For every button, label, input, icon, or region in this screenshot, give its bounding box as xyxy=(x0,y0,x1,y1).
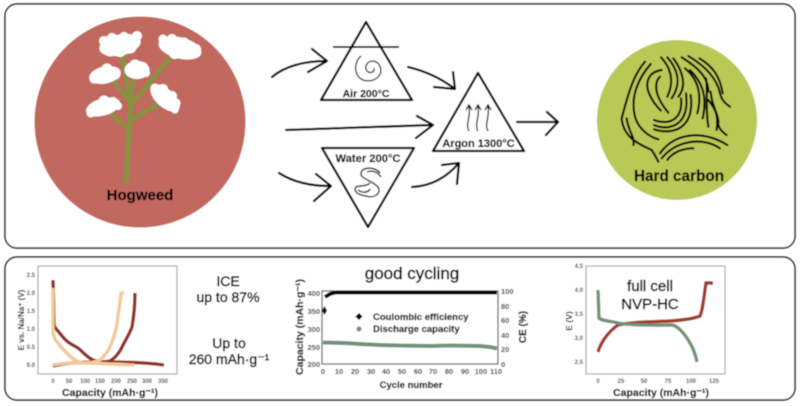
y axis ticks xyxy=(575,264,584,366)
chart: full cell xyxy=(564,264,725,399)
text: ICE percentage: up to 87% xyxy=(196,289,260,305)
icon: spiral xyxy=(356,56,381,81)
bottom axis ticks: 70 xyxy=(429,367,437,376)
left axis ticks: 300 xyxy=(307,325,320,334)
heading: good cycling: good cycling xyxy=(365,264,459,283)
icon: white flowers xyxy=(84,30,204,120)
right axis ticks: 0 xyxy=(501,360,505,369)
bottom axis ticks: 110 xyxy=(490,367,502,376)
x axis title: Capacity (mAh·g⁻¹) xyxy=(62,387,158,399)
triangle: water 200 C xyxy=(322,148,414,227)
bottom axis ticks: 10 xyxy=(335,367,343,376)
icon: carbon layers xyxy=(622,56,730,162)
y axis ticks: 3.0 xyxy=(575,336,584,342)
triangle: air 200 C xyxy=(321,22,412,100)
x axis ticks: 75 xyxy=(665,379,672,385)
bottom axis ticks: 30 xyxy=(367,367,375,376)
chart: half-cell charge discharge xyxy=(17,266,177,399)
legend: discharge capacity: Discharge capacity xyxy=(373,324,460,335)
y axis ticks: 4.0 xyxy=(575,288,584,294)
y axis ticks: 2.0 xyxy=(27,291,36,297)
x axis ticks: 150 xyxy=(95,379,106,385)
curve: charge xyxy=(598,283,713,352)
y axis ticks: 2.5 xyxy=(27,273,36,279)
label: Hard carbon: Hard carbon xyxy=(634,168,724,185)
y axis ticks: 2.5 xyxy=(575,360,584,366)
right axis ticks: 100 xyxy=(501,287,514,296)
right axis ticks: 60 xyxy=(501,316,509,325)
arrow: air to argon xyxy=(408,67,455,89)
y axis ticks: 4.5 xyxy=(575,264,584,270)
series: discharge capacity xyxy=(323,342,497,348)
y axis ticks: 0.0 xyxy=(27,363,36,369)
curve: light second cycle xyxy=(52,288,134,365)
bottom axis ticks: 40 xyxy=(382,367,390,376)
left axis ticks: 400 xyxy=(307,289,320,298)
curve: discharge xyxy=(598,290,697,362)
hogweed circle xyxy=(34,16,246,228)
text: capacity value: 260 mAh·g⁻¹ xyxy=(189,351,270,367)
right axis ticks: 80 xyxy=(501,302,509,311)
y axis title: E vs. Na/Na⁺ (V) xyxy=(17,289,26,350)
bottom axis ticks: 0 xyxy=(321,367,325,376)
panel: electrochemical results xyxy=(5,257,795,400)
icon: rising heat arrows xyxy=(466,105,491,131)
bottom axis ticks: 80 xyxy=(445,367,453,376)
label: Argon 1300 C: Argon 1300°C xyxy=(442,138,515,150)
arrow: to water treatment xyxy=(279,173,331,201)
arrow: to argon direct xyxy=(286,116,433,138)
x axis ticks: 0 xyxy=(596,379,600,385)
right axis ticks: 20 xyxy=(501,345,509,354)
triangle: argon 1300 C xyxy=(433,73,524,151)
arrow: to air treatment xyxy=(272,49,327,77)
x axis title: Cycle number xyxy=(380,380,443,391)
left axis ticks xyxy=(307,289,320,369)
bottom axis ticks: 50 xyxy=(398,367,406,376)
x axis ticks: 100 xyxy=(686,379,697,385)
label: full cell: full cell xyxy=(627,278,673,295)
right axis title: CE (%) xyxy=(518,311,529,343)
label: Hogweed: Hogweed xyxy=(107,187,173,204)
bottom axis ticks: 20 xyxy=(351,367,359,376)
arrow: argon to hard carbon xyxy=(517,112,558,135)
x axis ticks: 125 xyxy=(709,379,720,385)
icon: water swirl xyxy=(355,168,381,197)
x axis ticks xyxy=(596,379,720,385)
bottom axis ticks: 90 xyxy=(461,367,469,376)
text: capacity label: Up to xyxy=(212,335,246,351)
x axis ticks: 300 xyxy=(142,379,153,385)
panel: synthesis route xyxy=(5,4,795,248)
label: Air 200 C: Air 200°C xyxy=(343,88,390,100)
y axis ticks xyxy=(27,273,36,369)
label: Water 200 C: Water 200°C xyxy=(336,153,400,165)
x axis title: Capacity (mAh·g⁻¹) xyxy=(613,387,709,399)
left axis ticks: 200 xyxy=(307,360,320,369)
right axis ticks xyxy=(501,287,514,369)
y axis ticks: 1.0 xyxy=(27,327,36,333)
x axis ticks: 50 xyxy=(641,379,648,385)
text: ICE value: ICE xyxy=(216,273,240,289)
right axis ticks: 40 xyxy=(501,331,509,340)
series: coulombic efficiency xyxy=(322,292,497,315)
legend: coulombic efficiency: Coulombic efficiency xyxy=(373,312,469,323)
x axis ticks: 350 xyxy=(158,379,169,385)
curve: dark first cycle xyxy=(53,280,164,366)
x axis ticks: 200 xyxy=(111,379,122,385)
label: NVP-HC: NVP-HC xyxy=(621,296,679,313)
x axis ticks xyxy=(51,379,169,385)
hard carbon circle xyxy=(597,40,757,200)
bottom axis ticks: 60 xyxy=(414,367,422,376)
y axis ticks: 3.5 xyxy=(575,312,584,318)
y axis ticks: 0.5 xyxy=(27,345,36,351)
chart: cycling stability xyxy=(294,279,529,391)
left axis title: Capacity (mAh·g⁻¹) xyxy=(294,279,306,375)
x axis ticks: 250 xyxy=(127,379,138,385)
y axis title: E (V) xyxy=(564,311,574,331)
y axis ticks: 1.5 xyxy=(27,309,36,315)
arrow: water to argon xyxy=(412,163,459,187)
x axis ticks: 50 xyxy=(66,379,73,385)
x axis ticks: 100 xyxy=(80,379,91,385)
icon: plant stems xyxy=(110,55,170,182)
left axis ticks: 350 xyxy=(307,307,320,316)
x axis ticks: 0 xyxy=(51,379,55,385)
left axis ticks: 250 xyxy=(307,343,320,352)
bottom axis ticks xyxy=(321,367,502,376)
x axis ticks: 25 xyxy=(618,379,625,385)
bottom axis ticks: 100 xyxy=(475,367,487,376)
